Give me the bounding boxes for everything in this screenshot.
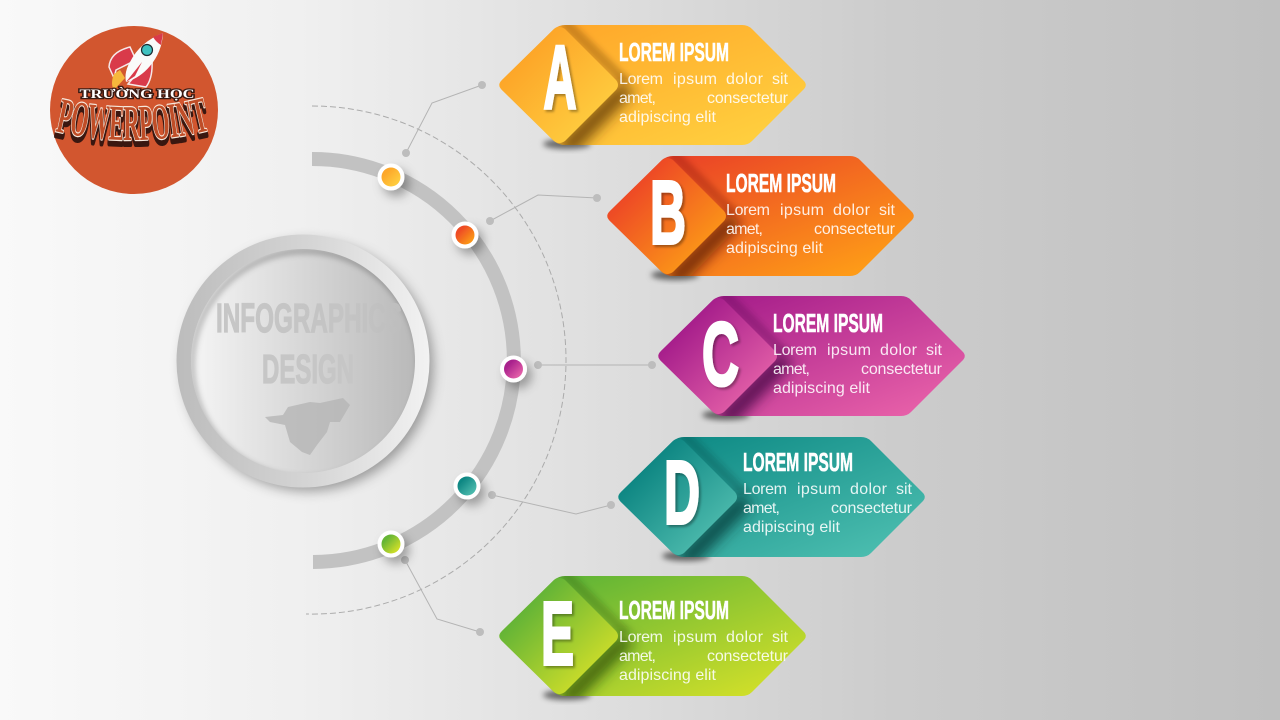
card C diamond <box>659 298 777 414</box>
card D fold shadow <box>676 431 754 569</box>
card C body: consectetur <box>861 361 943 378</box>
card D body: dolor <box>850 481 888 498</box>
arc node: B <box>452 222 478 248</box>
card D shadow <box>662 551 710 561</box>
card D body: amet, <box>743 500 780 517</box>
card C hexagon <box>658 296 965 416</box>
card C body: Lorem <box>773 342 817 359</box>
card D diamond <box>619 439 737 555</box>
card B <box>607 150 914 288</box>
card B body: amet, <box>726 221 763 238</box>
card C shadow <box>702 410 750 420</box>
card E body: amet, <box>619 648 656 665</box>
disc <box>191 249 415 473</box>
card A title: LOREM IPSUM <box>619 39 729 67</box>
card E diamond <box>500 578 618 694</box>
card E body: ipsum <box>673 629 717 646</box>
card B shadow <box>651 270 699 280</box>
card A <box>499 19 806 157</box>
card E body: consectetur <box>707 648 789 665</box>
card B title: LOREM IPSUM <box>726 170 836 198</box>
card E shadow <box>543 690 591 700</box>
card A body: adipiscing elit <box>619 109 717 126</box>
card B body: consectetur <box>814 221 896 238</box>
card A body: ipsum <box>673 71 717 88</box>
logo: Trường Học PowerPoint <box>50 26 218 194</box>
ring shadow <box>183 241 433 491</box>
card D body: Lorem <box>743 481 787 498</box>
card D body: consectetur <box>831 500 913 517</box>
card B letter: B <box>650 164 686 264</box>
card A letter: A <box>544 28 576 128</box>
card E fold shadow <box>557 570 635 708</box>
card D body: ipsum <box>797 481 841 498</box>
card D body: adipiscing elit <box>743 519 841 536</box>
card A body: amet, <box>619 90 656 107</box>
card A body: dolor <box>726 71 764 88</box>
card D title: LOREM IPSUM <box>743 449 853 477</box>
card E title: LOREM IPSUM <box>619 597 729 625</box>
card C body <box>773 342 943 397</box>
card C title: LOREM IPSUM <box>773 310 883 338</box>
card B body: dolor <box>833 202 871 219</box>
card E body: Lorem <box>619 629 663 646</box>
card D hexagon <box>618 437 925 557</box>
arc node: A <box>378 164 404 190</box>
card B body: ipsum <box>780 202 824 219</box>
card A hexagon <box>499 25 806 145</box>
card A body: consectetur <box>707 90 789 107</box>
card A diamond <box>500 27 618 143</box>
icon: rocket <box>109 33 163 90</box>
ring <box>176 234 430 488</box>
heading: design: DESIGN <box>262 346 354 392</box>
card D <box>618 431 925 569</box>
card B body: adipiscing elit <box>726 240 824 257</box>
card C letter: C <box>702 305 739 405</box>
card C body: adipiscing elit <box>773 380 871 397</box>
card D body <box>743 481 913 536</box>
card C body: sit <box>926 342 943 359</box>
card C body: ipsum <box>827 342 871 359</box>
card B fold shadow <box>665 150 743 288</box>
card E body: dolor <box>726 629 764 646</box>
card C <box>658 290 965 428</box>
card B body: sit <box>879 202 896 219</box>
connector lines <box>405 85 652 632</box>
card A body: Lorem <box>619 71 663 88</box>
card E body <box>619 629 789 684</box>
logo text: powerpoint: POWERPOINT <box>54 97 208 142</box>
card E body: adipiscing elit <box>619 667 717 684</box>
card A fold shadow <box>557 19 635 157</box>
card E letter: E <box>541 584 574 684</box>
card E body: sit <box>772 629 789 646</box>
card B hexagon <box>607 156 914 276</box>
disc inner shadow <box>192 251 420 479</box>
logo text: truong hoc: TRƯỜNG HỌC <box>80 86 194 101</box>
card A body <box>619 71 789 126</box>
card E <box>499 570 806 708</box>
card A shadow <box>543 139 591 149</box>
dashed outer arc <box>306 106 566 614</box>
connector end dots <box>401 81 656 636</box>
card C body: amet, <box>773 361 810 378</box>
card B body: Lorem <box>726 202 770 219</box>
card A body: sit <box>772 71 789 88</box>
card D letter: D <box>664 444 700 544</box>
card E hexagon <box>499 576 806 696</box>
arc node: E <box>378 530 404 558</box>
main arc <box>312 159 514 562</box>
logo text: powerpoint shadow: POWERPOINT <box>54 100 208 147</box>
card C fold shadow <box>716 290 794 428</box>
arc node: C <box>500 356 527 382</box>
card C body: dolor <box>880 342 918 359</box>
card B body <box>726 202 896 257</box>
heading: infographics: INFOGRAPHICS <box>216 295 402 341</box>
center badge <box>176 234 433 491</box>
arc node: D <box>454 472 480 500</box>
card D body: sit <box>896 481 913 498</box>
card B diamond <box>608 158 726 274</box>
icon: north america map <box>265 398 350 455</box>
